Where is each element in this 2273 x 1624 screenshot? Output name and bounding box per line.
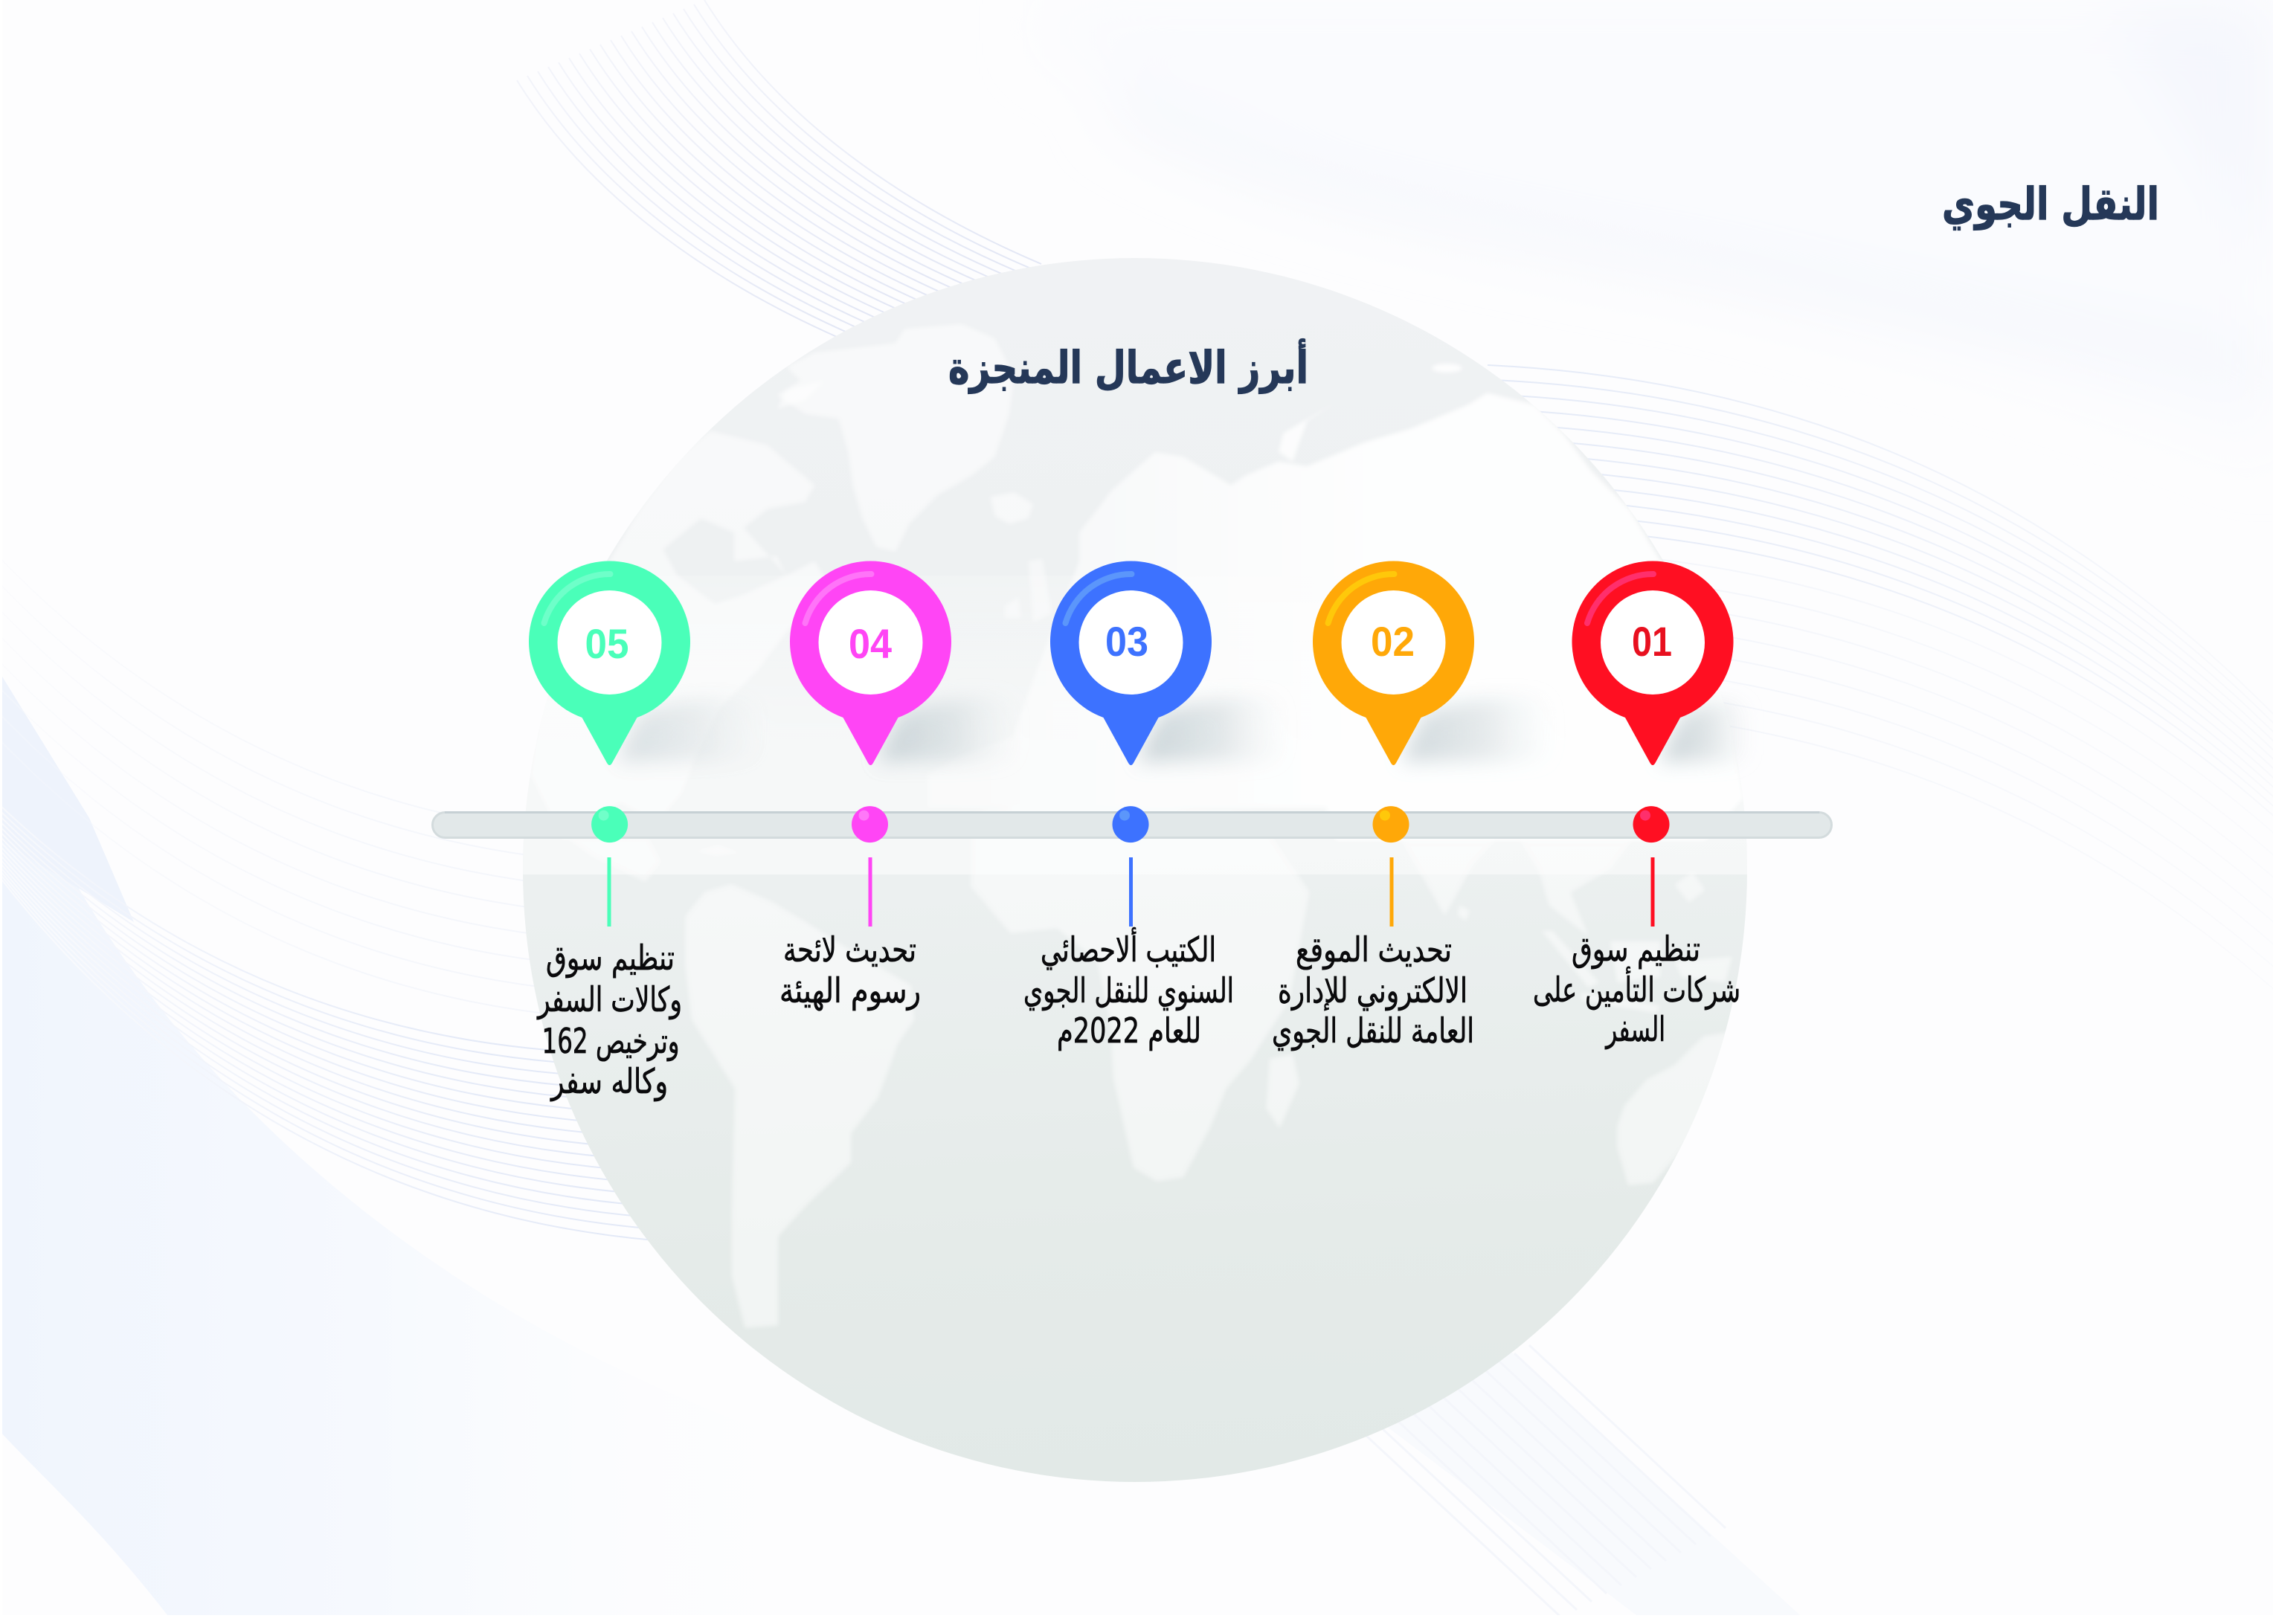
label 05: وترخيص 162 bbox=[541, 1021, 680, 1062]
step 01 bbox=[1533, 561, 1740, 1050]
label 01 bbox=[1533, 929, 1740, 1050]
label 03 bbox=[1023, 927, 1234, 1051]
heading: top achievements: أبرز الاعمال المنجزة bbox=[948, 338, 1308, 394]
label 01: شركات التأمين على bbox=[1533, 966, 1740, 1011]
label 04 bbox=[779, 929, 921, 1011]
pin 03 bbox=[1050, 561, 1212, 765]
label 02: تحديث الموقع bbox=[1296, 929, 1452, 970]
pin 01 bbox=[1572, 561, 1734, 765]
land: south america bbox=[637, 874, 1306, 1327]
pin 01: 01 bbox=[1632, 618, 1672, 665]
pin 05 bbox=[529, 561, 690, 765]
step 03 bbox=[1023, 561, 1234, 1051]
pin 05: 05 bbox=[585, 620, 629, 667]
pin 04: 04 bbox=[849, 620, 892, 667]
globe with world map bbox=[521, 258, 1755, 1482]
label 04: رسوم الهيئة bbox=[779, 970, 921, 1011]
connector 05 bbox=[607, 857, 611, 927]
timeline bar bbox=[433, 812, 1831, 837]
label 02 bbox=[1272, 929, 1474, 1051]
label 03: الكتيب ألاحصائي bbox=[1041, 927, 1216, 970]
land: south asia and australia bbox=[1424, 874, 1729, 1184]
pin 03: 03 bbox=[1105, 618, 1148, 665]
marker dot 02 bbox=[1373, 806, 1409, 842]
mist band over globe bbox=[523, 686, 1747, 874]
pin 02: 02 bbox=[1371, 618, 1415, 665]
label 02: العامة للنقل الجوي bbox=[1272, 1011, 1474, 1051]
label 05: تنظيم سوق bbox=[546, 938, 675, 979]
marker dot 03 bbox=[1113, 806, 1148, 842]
label 01: تنظيم سوق bbox=[1572, 929, 1700, 970]
land: eurasia bbox=[1076, 364, 1721, 740]
connector 02 bbox=[1389, 857, 1394, 927]
step 02 bbox=[1272, 561, 1474, 1051]
step 04 bbox=[779, 561, 951, 1011]
label 04: تحديث لائحة bbox=[783, 929, 916, 970]
marker dot 01 bbox=[1633, 806, 1669, 842]
connector 01 bbox=[1651, 857, 1654, 927]
label 03: السنوي للنقل الجوي bbox=[1023, 970, 1234, 1011]
label 05 bbox=[537, 938, 682, 1102]
label 05: وكاله سفر bbox=[550, 1061, 668, 1102]
pin 02 bbox=[1313, 561, 1474, 765]
land: europe fragments bbox=[1005, 558, 1052, 622]
connector 03 bbox=[1129, 857, 1133, 927]
step 05 bbox=[529, 561, 690, 1102]
label 05: وكالات السفر bbox=[537, 979, 682, 1020]
label 02: الالكتروني للإدارة bbox=[1278, 970, 1467, 1011]
pin shadows bbox=[617, 697, 1752, 761]
marker dot 04 bbox=[852, 806, 888, 842]
land: americas and greenland bbox=[613, 328, 1029, 576]
label 03: للعام 2022م bbox=[1057, 1011, 1201, 1051]
label 01: السفر bbox=[1605, 1009, 1665, 1050]
marker dot 05 bbox=[591, 806, 628, 842]
pin 04 bbox=[790, 561, 951, 765]
land: africa bbox=[973, 874, 1306, 1179]
title: air transport: النقل الجوي bbox=[1942, 178, 2159, 231]
connector 04 bbox=[869, 857, 872, 927]
